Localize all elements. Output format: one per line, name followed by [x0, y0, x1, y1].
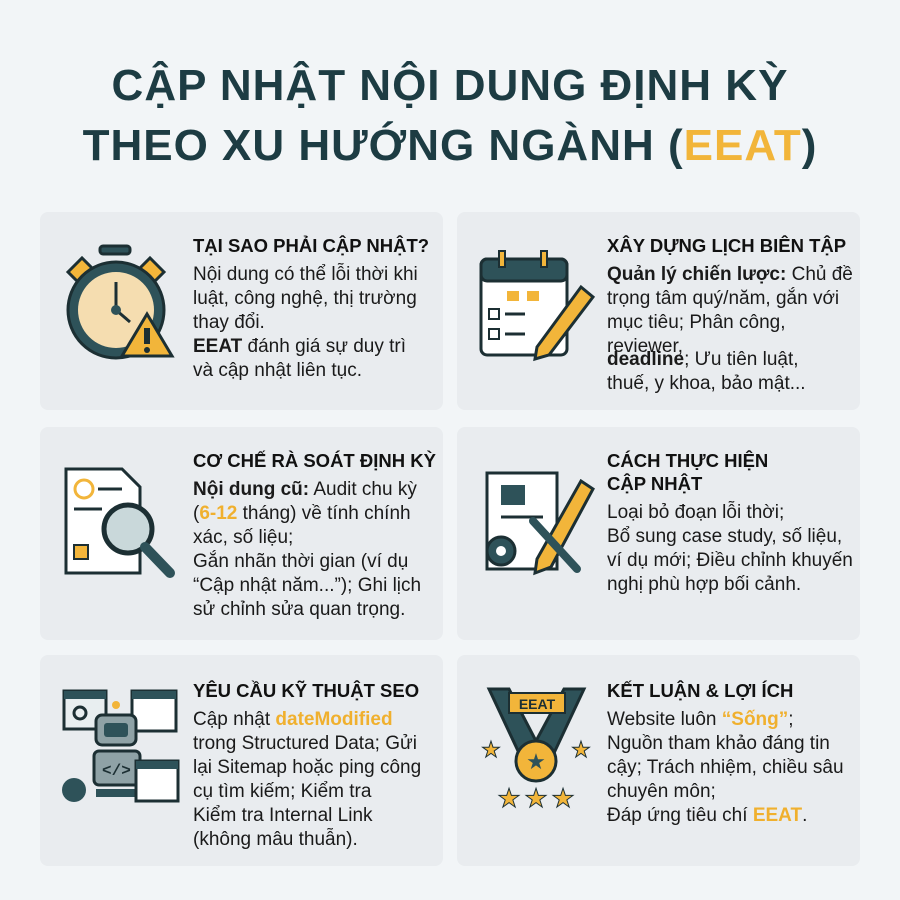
text: conclusion: Đáp ứng tiêu chí EEAT. — [607, 805, 807, 826]
icon: EEAT medal with stars — [481, 688, 591, 813]
text: why update — [193, 235, 429, 381]
text: editorial calendar: Quản lý chiến lược: Chủ đề — [607, 264, 853, 285]
icon: EEAT medal with stars: ★ — [481, 737, 501, 762]
text: review mechanism: sử chỉnh sửa quan trọng. — [193, 599, 405, 620]
text: why update: EEAT đánh giá sự duy trì — [193, 336, 406, 357]
icon: EEAT medal with stars: ★ — [571, 737, 591, 762]
text: SEO technical: trong Structured Data; Gửi — [193, 733, 417, 754]
title — [83, 61, 817, 170]
panel: review mechanism — [40, 427, 443, 640]
text: SEO technical: cụ tìm kiếm; Kiểm tra — [193, 781, 371, 802]
panel: why update — [40, 212, 443, 410]
text: editorial calendar — [607, 235, 853, 394]
text: SEO technical: Cập nhật dateModified — [193, 709, 393, 730]
panel: editorial calendar — [457, 212, 860, 410]
panel: how to update — [457, 427, 860, 640]
panel: SEO technical — [40, 655, 443, 866]
text: conclusion: Nguồn tham khảo đáng tin — [607, 733, 830, 754]
text: SEO technical: YÊU CẦU KỸ THUẬT SEO — [193, 680, 419, 701]
icon: EEAT medal with stars: ★ — [497, 783, 521, 813]
text: why update: TẠI SAO PHẢI CẬP NHẬT? — [193, 235, 429, 256]
text: SEO technical — [193, 680, 421, 850]
icon: robot with windows — [62, 690, 180, 802]
text: how to update: Bổ sung case study, số liệu, — [607, 526, 842, 547]
text: editorial calendar: thuế, y khoa, bảo mật... — [607, 373, 806, 394]
text: how to update: nghị phù hợp bối cảnh. — [607, 574, 801, 595]
text: how to update — [607, 450, 853, 595]
text: editorial calendar: reviewer, — [607, 336, 683, 357]
text: how to update: ví dụ mới; Điều chỉnh khuyến — [607, 550, 853, 571]
text: conclusion: KẾT LUẬN & LỢI ÍCH — [607, 680, 793, 701]
icon: EEAT medal with stars: ★ — [526, 749, 546, 774]
icon: EEAT medal with stars: EEAT — [519, 696, 556, 712]
icon: document with tools — [486, 472, 595, 576]
text: review mechanism: Nội dung cũ: Audit chu kỳ — [193, 479, 417, 500]
text: conclusion: cậy; Trách nhiệm, chiều sâu — [607, 757, 844, 778]
text: editorial calendar: XÂY DỰNG LỊCH BIÊN TẬP — [607, 235, 846, 256]
text: why update: và cập nhật liên tục. — [193, 360, 362, 381]
icon: calendar with pencil — [480, 250, 595, 362]
text: conclusion — [607, 680, 844, 826]
icon: document with magnifier — [64, 468, 175, 578]
icon: EEAT medal with stars: ★ — [524, 783, 548, 813]
text: review mechanism: Gắn nhãn thời gian (ví dụ — [193, 551, 408, 572]
text: how to update: Loại bỏ đoạn lỗi thời; — [607, 502, 784, 523]
title: CẬP NHẬT NỘI DUNG ĐỊNH KỲ — [112, 61, 788, 110]
text: review mechanism: xác, số liệu; — [193, 527, 293, 548]
text: editorial calendar: trọng tâm quý/năm, gắn với — [607, 288, 839, 309]
icon: alarm clock — [66, 244, 175, 360]
text: SEO technical: lại Sitemap hoặc ping công — [193, 757, 421, 778]
text: how to update: CẬP NHẬT — [607, 473, 702, 494]
text: why update: luật, công nghệ, thị trường — [193, 288, 417, 309]
text: review mechanism — [193, 450, 436, 620]
text: SEO technical: Kiểm tra Internal Link — [193, 805, 373, 826]
panel: conclusion — [457, 655, 860, 866]
text: why update: Nội dung có thể lỗi thời khi — [193, 264, 418, 285]
icon: robot with windows: </> — [102, 762, 131, 780]
title: THEO XU HƯỚNG NGÀNH (EEAT) — [83, 121, 817, 170]
text: review mechanism: (6-12 tháng) về tính chính — [193, 503, 411, 524]
text: SEO technical: (không mâu thuẫn). — [193, 829, 358, 850]
text: review mechanism: “Cập nhật năm...”); Ghi lịch — [193, 575, 421, 596]
icon: EEAT medal with stars: ★ — [551, 783, 575, 813]
text: editorial calendar: mục tiêu; Phân công, deadline; Ưu tiên luật, — [607, 312, 799, 370]
text: why update: thay đổi. — [193, 312, 265, 333]
text: conclusion: Website luôn “Sống”; — [607, 709, 794, 730]
text: how to update: CÁCH THỰC HIỆN — [607, 450, 768, 471]
text: conclusion: chuyên môn; — [607, 781, 716, 802]
text: review mechanism: CƠ CHẾ RÀ SOÁT ĐỊNH KỲ — [193, 450, 436, 471]
